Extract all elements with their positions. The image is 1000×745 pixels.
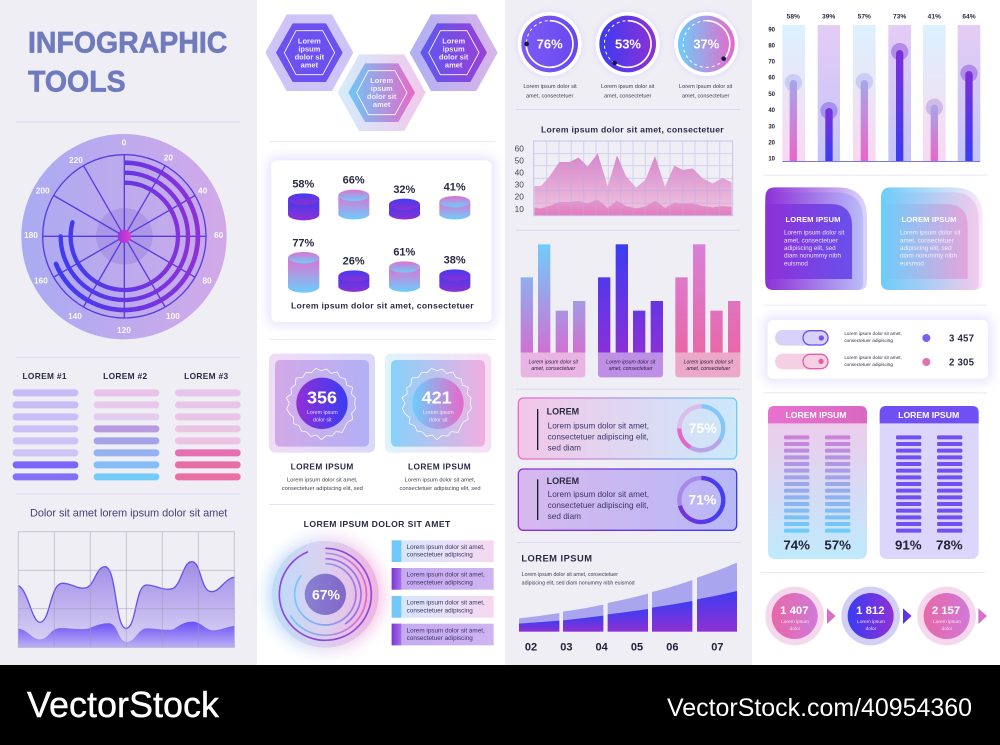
- legend row 4: consectetuer adipiscing: [407, 635, 473, 642]
- stat card 421: 421: [422, 387, 452, 407]
- info box 75%: 75%: [689, 420, 717, 436]
- legend row 2: Lorem ipsum dolor sit amet,: [407, 572, 485, 579]
- hexagon 2: [338, 54, 426, 131]
- stat card 421: Lorem ipsum: [423, 410, 454, 416]
- bar group 2: Lorem ipsum dolor sit: [606, 359, 656, 365]
- info box 75%: consectetuer adipiscing elit,: [548, 433, 649, 442]
- info box 71%: sed diam: [548, 512, 581, 521]
- column 3 bottom: info boxes and growth chart: [516, 389, 741, 654]
- info box 75%: sed diam: [548, 444, 581, 453]
- stat card 356 text: [282, 461, 363, 492]
- growth chart axis labels: 04: [596, 642, 609, 654]
- info box 71%: Lorem ipsum dolor sit amet,: [548, 490, 649, 499]
- stat card 356 text: consectetuer adipiscing elit, sed: [282, 486, 363, 492]
- lollipop chart: 30: [768, 124, 776, 130]
- cylinder values: 41%: [444, 181, 466, 193]
- cylinder values: 38%: [444, 254, 466, 266]
- progress captions: Lorem ipsum dolor sit: [523, 84, 577, 90]
- toggle text: [844, 331, 902, 367]
- column 2 background: [257, 0, 505, 665]
- growth chart axis labels: 02: [525, 642, 537, 654]
- legend row 3: [392, 596, 494, 618]
- info box 71%: [518, 469, 737, 530]
- stripes panel pink: 74%: [783, 537, 810, 552]
- hexagon 3: dolor sit: [439, 52, 469, 61]
- lollipop chart: 39%: [822, 13, 835, 20]
- rounded card 2: LOREM IPSUM: [901, 215, 956, 224]
- stat card 356: 356: [307, 387, 337, 407]
- info box 75%: LOREM: [547, 406, 579, 416]
- stat card 421: [385, 354, 491, 453]
- progress captions: Lorem ipsum dolor sit: [679, 84, 733, 90]
- growth chart axis labels: 03: [560, 642, 572, 654]
- toggle text: consectetuer adipiscing: [844, 362, 893, 367]
- lollipop chart: 64%: [962, 13, 976, 20]
- cylinder values: [292, 175, 466, 268]
- bar group 2: [598, 244, 663, 377]
- number circle 2 157: 2 157: [932, 605, 960, 617]
- cylinder 38%: [439, 269, 470, 292]
- cylinder values: 32%: [393, 184, 416, 196]
- growth chart heading: LOREM IPSUM: [521, 554, 592, 564]
- toggle 2: [775, 354, 829, 369]
- bar group 2: amet, consectetuer: [609, 366, 653, 372]
- cylinder 66%: [338, 190, 369, 220]
- progress captions: [523, 84, 733, 99]
- donut chart: 67%: [312, 587, 341, 603]
- column 2 top: hexagons and cylinders: [265, 14, 498, 340]
- toggle values: [922, 333, 975, 368]
- growth area chart: [519, 563, 737, 632]
- column 1 top: title and radial chart: [16, 27, 240, 339]
- bar list headers: LOREM #3: [184, 371, 229, 381]
- number circle 1 812: Lorem ipsum: [857, 619, 885, 625]
- lollipop chart: [768, 13, 980, 163]
- arrow 1: [827, 608, 836, 624]
- hexagon 2: amet: [373, 100, 391, 109]
- bar group 1: amet, consectetuer: [531, 366, 576, 372]
- legend row 2: [392, 568, 494, 590]
- stat card 421: dolor sit: [429, 418, 448, 424]
- column 4 bottom: toggles, stripes panels, number circles: [761, 305, 992, 645]
- area chart axis labels: 50: [515, 156, 524, 166]
- lollipop chart: 57%: [858, 13, 871, 20]
- bar list headers: LOREM #2: [103, 371, 148, 381]
- hexagon 1: amet: [301, 60, 319, 69]
- rounded card 2: adipiscing elit, sed: [900, 245, 952, 252]
- legend row 1: Lorem ipsum dolor sit amet,: [407, 544, 485, 551]
- area chart axis labels: [515, 144, 524, 214]
- bar list 2: [94, 389, 159, 480]
- legend row 1: consectetuer adipiscing: [407, 552, 473, 559]
- progress circle 76%: [516, 11, 583, 77]
- radial chart: 140: [68, 311, 82, 321]
- hexagon 1: ipsum: [298, 44, 321, 53]
- growth chart axis labels: 05: [631, 642, 643, 654]
- area chart axis labels: 20: [515, 192, 524, 202]
- toggle text: Lorem ipsum dolor sit amet,: [844, 355, 902, 360]
- title: [28, 27, 227, 99]
- info box 75%: [518, 398, 737, 459]
- progress captions: Lorem ipsum dolor sit: [601, 84, 655, 90]
- growth chart axis labels: 06: [666, 642, 678, 654]
- column 4 background: [752, 0, 1000, 665]
- title: TOOLS: [28, 66, 126, 99]
- number circle 1 407: Lorem ipsum: [781, 619, 809, 625]
- bar group 1: Lorem ipsum dolor sit: [529, 359, 579, 365]
- title: INFOGRAPHIC: [28, 27, 227, 60]
- stat card 356: Lorem ipsum: [307, 410, 338, 416]
- stat card 421 text: LOREM IPSUM: [408, 461, 471, 471]
- column 2 bottom: stat cards and donut: [269, 354, 494, 651]
- rounded card 1: [765, 187, 867, 290]
- stripes panel pink: [768, 406, 867, 559]
- toggle values: 3 457: [949, 333, 974, 344]
- column 3 top: progress circles, area chart, bar groups: [515, 11, 740, 377]
- arrow 3: [978, 608, 987, 624]
- column 1 background: [0, 0, 257, 665]
- radial chart: 180: [24, 230, 38, 240]
- growth chart text: adipiscing elit, sed diam nonummy nibh euismod: [522, 581, 635, 587]
- lollipop chart: 80: [768, 43, 776, 49]
- number circle 2 157: [917, 587, 976, 645]
- column 3 background: [505, 0, 752, 665]
- cylinder 32%: [389, 199, 420, 220]
- progress circle 53%: 53%: [615, 37, 641, 52]
- stripes panel pink: 57%: [824, 537, 851, 552]
- info box 71%: LOREM: [547, 476, 579, 486]
- rounded card 1: euismod: [784, 261, 808, 268]
- progress captions: amet, consectetuer: [604, 93, 652, 99]
- progress captions: amet, consectetuer: [682, 93, 730, 99]
- lollipop chart: 60: [768, 76, 776, 82]
- watermark footer: VectorStock.com/40954360: [667, 695, 972, 722]
- toggle text: consectetuer adipiscing: [844, 338, 893, 343]
- radial chart: 20: [164, 153, 173, 163]
- progress circle 76%: 76%: [537, 37, 563, 52]
- cylinder values: 66%: [343, 175, 365, 187]
- stripes panel purple: LOREM IPSUM: [898, 410, 959, 420]
- info box 75%: Lorem ipsum dolor sit amet,: [548, 422, 649, 431]
- number circle 1 407: [765, 587, 824, 645]
- rounded card 1: Lorem ipsum dolor sit: [784, 229, 845, 236]
- rounded card 2: diam nonummy nibh: [900, 253, 957, 260]
- number circle 1 812: dolor: [866, 626, 877, 632]
- rounded card 1: LOREM IPSUM: [785, 215, 840, 224]
- area chart heading: Lorem ipsum dolor sit amet, consectetuer: [541, 124, 724, 134]
- radial chart: 100: [166, 311, 180, 321]
- donut heading: LOREM IPSUM DOLOR SIT AMET: [304, 519, 451, 529]
- column 1 bottom: bar lists and wave chart: [13, 357, 241, 647]
- lollipop chart: 73%: [893, 13, 906, 20]
- area chart axis labels: 30: [515, 180, 524, 190]
- bar list headers: LOREM #1: [23, 371, 67, 381]
- toggle values: 2 305: [949, 357, 975, 368]
- area chart: [534, 141, 733, 216]
- donut chart: [269, 538, 382, 651]
- stat card 356 text: LOREM IPSUM: [291, 461, 353, 471]
- rounded card 1: amet, consectetuer: [784, 237, 838, 244]
- stat card 356: [269, 354, 375, 453]
- lollipop chart: 50: [768, 92, 776, 98]
- area chart axis labels: 40: [515, 168, 524, 178]
- info box 71%: consectetuer adipiscing elit,: [548, 501, 649, 510]
- lollipop chart: 20: [768, 140, 776, 146]
- hexagon 1: [265, 14, 353, 91]
- cylinders card: [267, 156, 496, 326]
- hexagon 2: Lorem: [370, 76, 393, 85]
- rounded card 2: Lorem ipsum dolor sit: [900, 229, 961, 236]
- hexagon 3: amet: [445, 60, 463, 69]
- cylinder values: 77%: [292, 237, 315, 249]
- legend row 3: Lorem ipsum dolor sit amet,: [407, 600, 485, 607]
- progress circle 37%: 37%: [693, 37, 720, 52]
- arrow 2: [903, 608, 912, 624]
- lollipop chart: 90: [768, 27, 776, 33]
- bar list 3: [175, 389, 241, 480]
- rounded card 1: adipiscing elit, sed: [784, 245, 836, 252]
- number circle 1 407: dolor: [790, 626, 801, 632]
- rounded card 1: diam nonummy nibh: [784, 253, 841, 260]
- hexagon 2: ipsum: [371, 84, 393, 93]
- wave chart title: Dolor sit amet lorem ipsum dolor sit amet: [30, 508, 227, 520]
- number circle 1 407: 1 407: [780, 605, 809, 617]
- legend row 4: [392, 624, 494, 645]
- info box 71%: 71%: [688, 491, 717, 507]
- lollipop chart: 41%: [928, 13, 941, 20]
- progress circle 37%: [673, 11, 740, 77]
- radial chart: 60: [214, 230, 224, 240]
- radial chart: 0: [122, 137, 127, 147]
- bar group 3: [675, 244, 740, 377]
- hexagon 1: Lorem: [298, 36, 321, 45]
- cylinder values: 58%: [292, 179, 315, 191]
- legend row 4: Lorem ipsum dolor sit amet,: [407, 627, 485, 634]
- legend row 2: consectetuer adipiscing: [407, 579, 473, 586]
- hexagon 3: [410, 14, 498, 91]
- watermark footer: VectorStock: [27, 684, 220, 725]
- progress captions: amet, consectetuer: [526, 93, 574, 99]
- hexagon 1: dolor sit: [295, 52, 325, 61]
- hexagon 2: dolor sit: [367, 92, 397, 101]
- number circle 2 157: dolor: [942, 626, 953, 632]
- bar group 1: [521, 244, 585, 377]
- lollipop chart: 70: [768, 60, 776, 66]
- number circle 2 157: Lorem ipsum: [933, 619, 961, 625]
- radial chart: 200: [36, 185, 50, 195]
- cylinder 26%: [338, 270, 369, 292]
- rounded card 2: euismod: [900, 261, 924, 268]
- stat card 356 text: Lorem ipsum dolor sit amet,: [287, 477, 358, 483]
- wave chart: [18, 532, 234, 647]
- cylinder 58%: [288, 193, 319, 220]
- toggle card: [764, 316, 992, 383]
- stat card 421 text: consectetuer adipiscing elit, sed: [399, 486, 481, 492]
- hexagon 3: ipsum: [443, 44, 465, 53]
- cylinder 61%: [389, 261, 420, 292]
- cylinders caption: Lorem ipsum dolor sit amet, consectetuer: [291, 301, 474, 311]
- rounded card 2: [881, 187, 983, 290]
- stripes panel purple: [880, 406, 979, 559]
- stripes panel purple: 78%: [936, 537, 963, 552]
- stripes panel pink: LOREM IPSUM: [785, 410, 846, 420]
- cylinder 77%: [288, 252, 319, 293]
- legend row 3: consectetuer adipiscing: [407, 607, 473, 614]
- stat card 421 text: Lorem ipsum dolor sit amet,: [405, 477, 476, 483]
- bar list headers: [23, 371, 229, 381]
- lollipop chart: 40: [768, 108, 776, 114]
- rounded card 2: amet, consectetuer: [900, 237, 954, 244]
- watermark footer: [0, 665, 1000, 745]
- lollipop chart: 10: [768, 157, 776, 163]
- progress circle 53%: [594, 11, 661, 77]
- lollipop chart: 58%: [787, 13, 800, 20]
- column 4 top: lollipop chart and rounded cards: [763, 13, 987, 290]
- toggle text: Lorem ipsum dolor sit amet,: [844, 331, 902, 336]
- legend row 1: [392, 540, 494, 562]
- cylinder values: 26%: [343, 256, 365, 268]
- radial chart: 120: [117, 325, 131, 335]
- radial chart: [21, 134, 227, 339]
- growth chart axis labels: [525, 642, 723, 654]
- bar list 1: [13, 389, 78, 480]
- growth chart text: [522, 572, 635, 587]
- radial chart: 160: [34, 275, 48, 285]
- stat card 421 text: [399, 461, 481, 492]
- bar group 3: amet, consectetuer: [686, 366, 731, 372]
- radial chart: 80: [202, 275, 212, 285]
- growth chart axis labels: 07: [711, 642, 723, 654]
- number circle 1 812: [841, 587, 900, 645]
- cylinder 41%: [439, 196, 470, 220]
- stat card 356: dolor sit: [313, 418, 332, 424]
- radial chart: 220: [69, 155, 83, 165]
- stripes panel purple: 91%: [895, 537, 922, 552]
- growth chart text: Lorem ipsum dolor sit amet, consectetuer: [522, 572, 618, 578]
- area chart axis labels: 10: [515, 204, 524, 214]
- radial chart: 40: [198, 185, 208, 195]
- bar group 3: Lorem ipsum dolor sit: [684, 359, 734, 365]
- toggle 1: [775, 330, 829, 346]
- area chart axis labels: 60: [515, 144, 524, 154]
- number circle 1 812: 1 812: [856, 605, 885, 617]
- cylinder values: 61%: [393, 247, 416, 259]
- hexagon 3: Lorem: [442, 36, 465, 45]
